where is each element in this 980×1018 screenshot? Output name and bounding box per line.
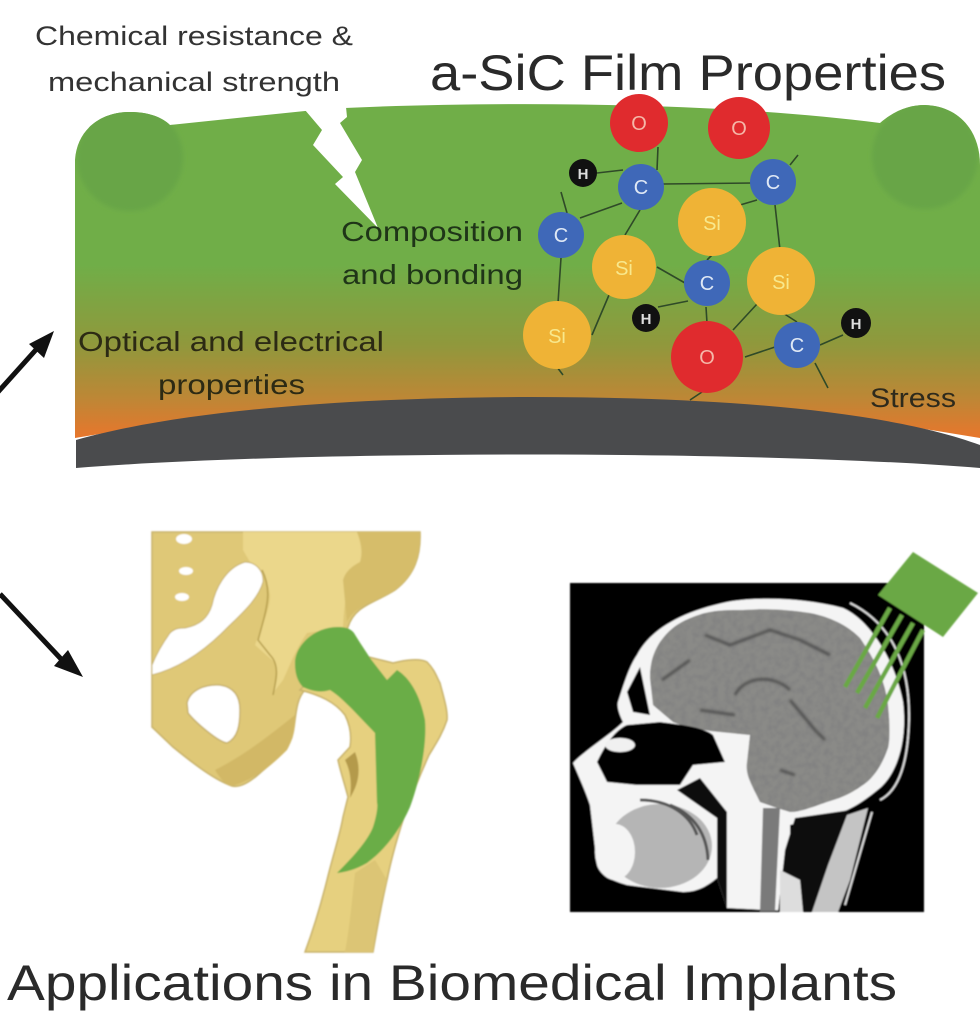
bonds: [557, 147, 843, 400]
label: chemical resistance: mechanical strength: [48, 67, 340, 97]
pharynx: [677, 778, 727, 908]
substrate: [76, 397, 980, 468]
label: optical and electrical: properties: [158, 369, 305, 400]
femur shaft shade: [345, 860, 387, 952]
atom: H: [632, 304, 660, 332]
scan background: [570, 583, 924, 912]
ilium fold: [258, 570, 276, 695]
label: optical and electrical: Optical and electrical: [78, 326, 384, 357]
brain sulci: [662, 630, 830, 775]
atom: C: [750, 159, 796, 205]
oral bright area: [595, 824, 635, 880]
atom: Si: [747, 247, 815, 315]
arrow: down right: [0, 594, 83, 677]
atom: C: [538, 212, 584, 258]
nasal cavities: [597, 722, 725, 785]
atom: H: H: [641, 311, 651, 328]
molecular structure: [523, 94, 871, 400]
frontal sinus: [627, 667, 650, 715]
atom: O: [671, 321, 743, 393]
femur: [300, 650, 447, 952]
pelvis gap: [152, 562, 263, 675]
atom: Si: [678, 188, 746, 256]
title: film properties: a-SiC Film Properties: [430, 45, 946, 101]
film body: [75, 104, 980, 438]
atom: Si: [592, 235, 656, 299]
vertebra marks: [175, 534, 193, 601]
neck highlights: [780, 870, 803, 912]
neck tissue: [812, 808, 868, 912]
atom: O: O: [631, 113, 647, 135]
label: stress: Stress: [870, 383, 956, 413]
atom: C: C: [790, 335, 804, 357]
title: applications: Applications in Biomedical Implants: [7, 955, 897, 1011]
atom: C: [684, 260, 730, 306]
atom: H: H: [578, 166, 588, 183]
label: composition and bonding: Composition: [341, 216, 523, 247]
spinal cord: [760, 808, 780, 911]
atom: O: O: [731, 118, 747, 140]
atom: C: [618, 164, 664, 210]
brain: [650, 609, 890, 812]
brain scan with electrode: [570, 552, 978, 912]
femur crease: [345, 752, 359, 798]
arrow: up right: [0, 331, 54, 392]
atom: Si: Si: [615, 258, 633, 280]
tongue stripes: [640, 800, 708, 860]
label: chemical resistance: [35, 21, 353, 97]
nasal highlight: [605, 738, 635, 752]
atom: O: [708, 97, 770, 159]
atom: H: [569, 159, 597, 187]
atom: Si: Si: [703, 213, 721, 235]
hip implant illustration: [152, 532, 447, 952]
pelvis lower dark: [215, 715, 295, 786]
skull and face: [573, 599, 904, 911]
atom: O: [610, 94, 668, 152]
label: composition and bonding: [341, 216, 523, 290]
tongue: [608, 804, 712, 888]
atom: Si: Si: [548, 326, 566, 348]
atom: C: C: [700, 273, 714, 295]
panel: a-SiC film: [75, 103, 980, 468]
film bulges: [77, 103, 978, 211]
label: optical and electrical: [78, 326, 384, 400]
atom: C: [774, 322, 820, 368]
label: chemical resistance: Chemical resistance &: [35, 21, 353, 51]
atom: H: [841, 308, 871, 338]
atom: H: H: [851, 316, 861, 333]
pelvis dark right: [343, 532, 420, 622]
atom: O: O: [699, 347, 715, 369]
label: composition and bonding: and bonding: [342, 259, 523, 290]
electrode: [845, 552, 978, 718]
implant: [295, 627, 425, 873]
atom: Si: Si: [772, 272, 790, 294]
neck dark region: [778, 810, 850, 912]
pelvis: [152, 532, 420, 786]
atom: C: C: [634, 177, 648, 199]
atom: Si: [523, 301, 591, 369]
pelvis opening: [187, 685, 240, 743]
outer scalp line: [845, 603, 909, 905]
atom: C: C: [554, 225, 568, 247]
pelvis light centre: [243, 532, 362, 693]
crack: [305, 107, 378, 228]
atom: C: C: [766, 172, 780, 194]
